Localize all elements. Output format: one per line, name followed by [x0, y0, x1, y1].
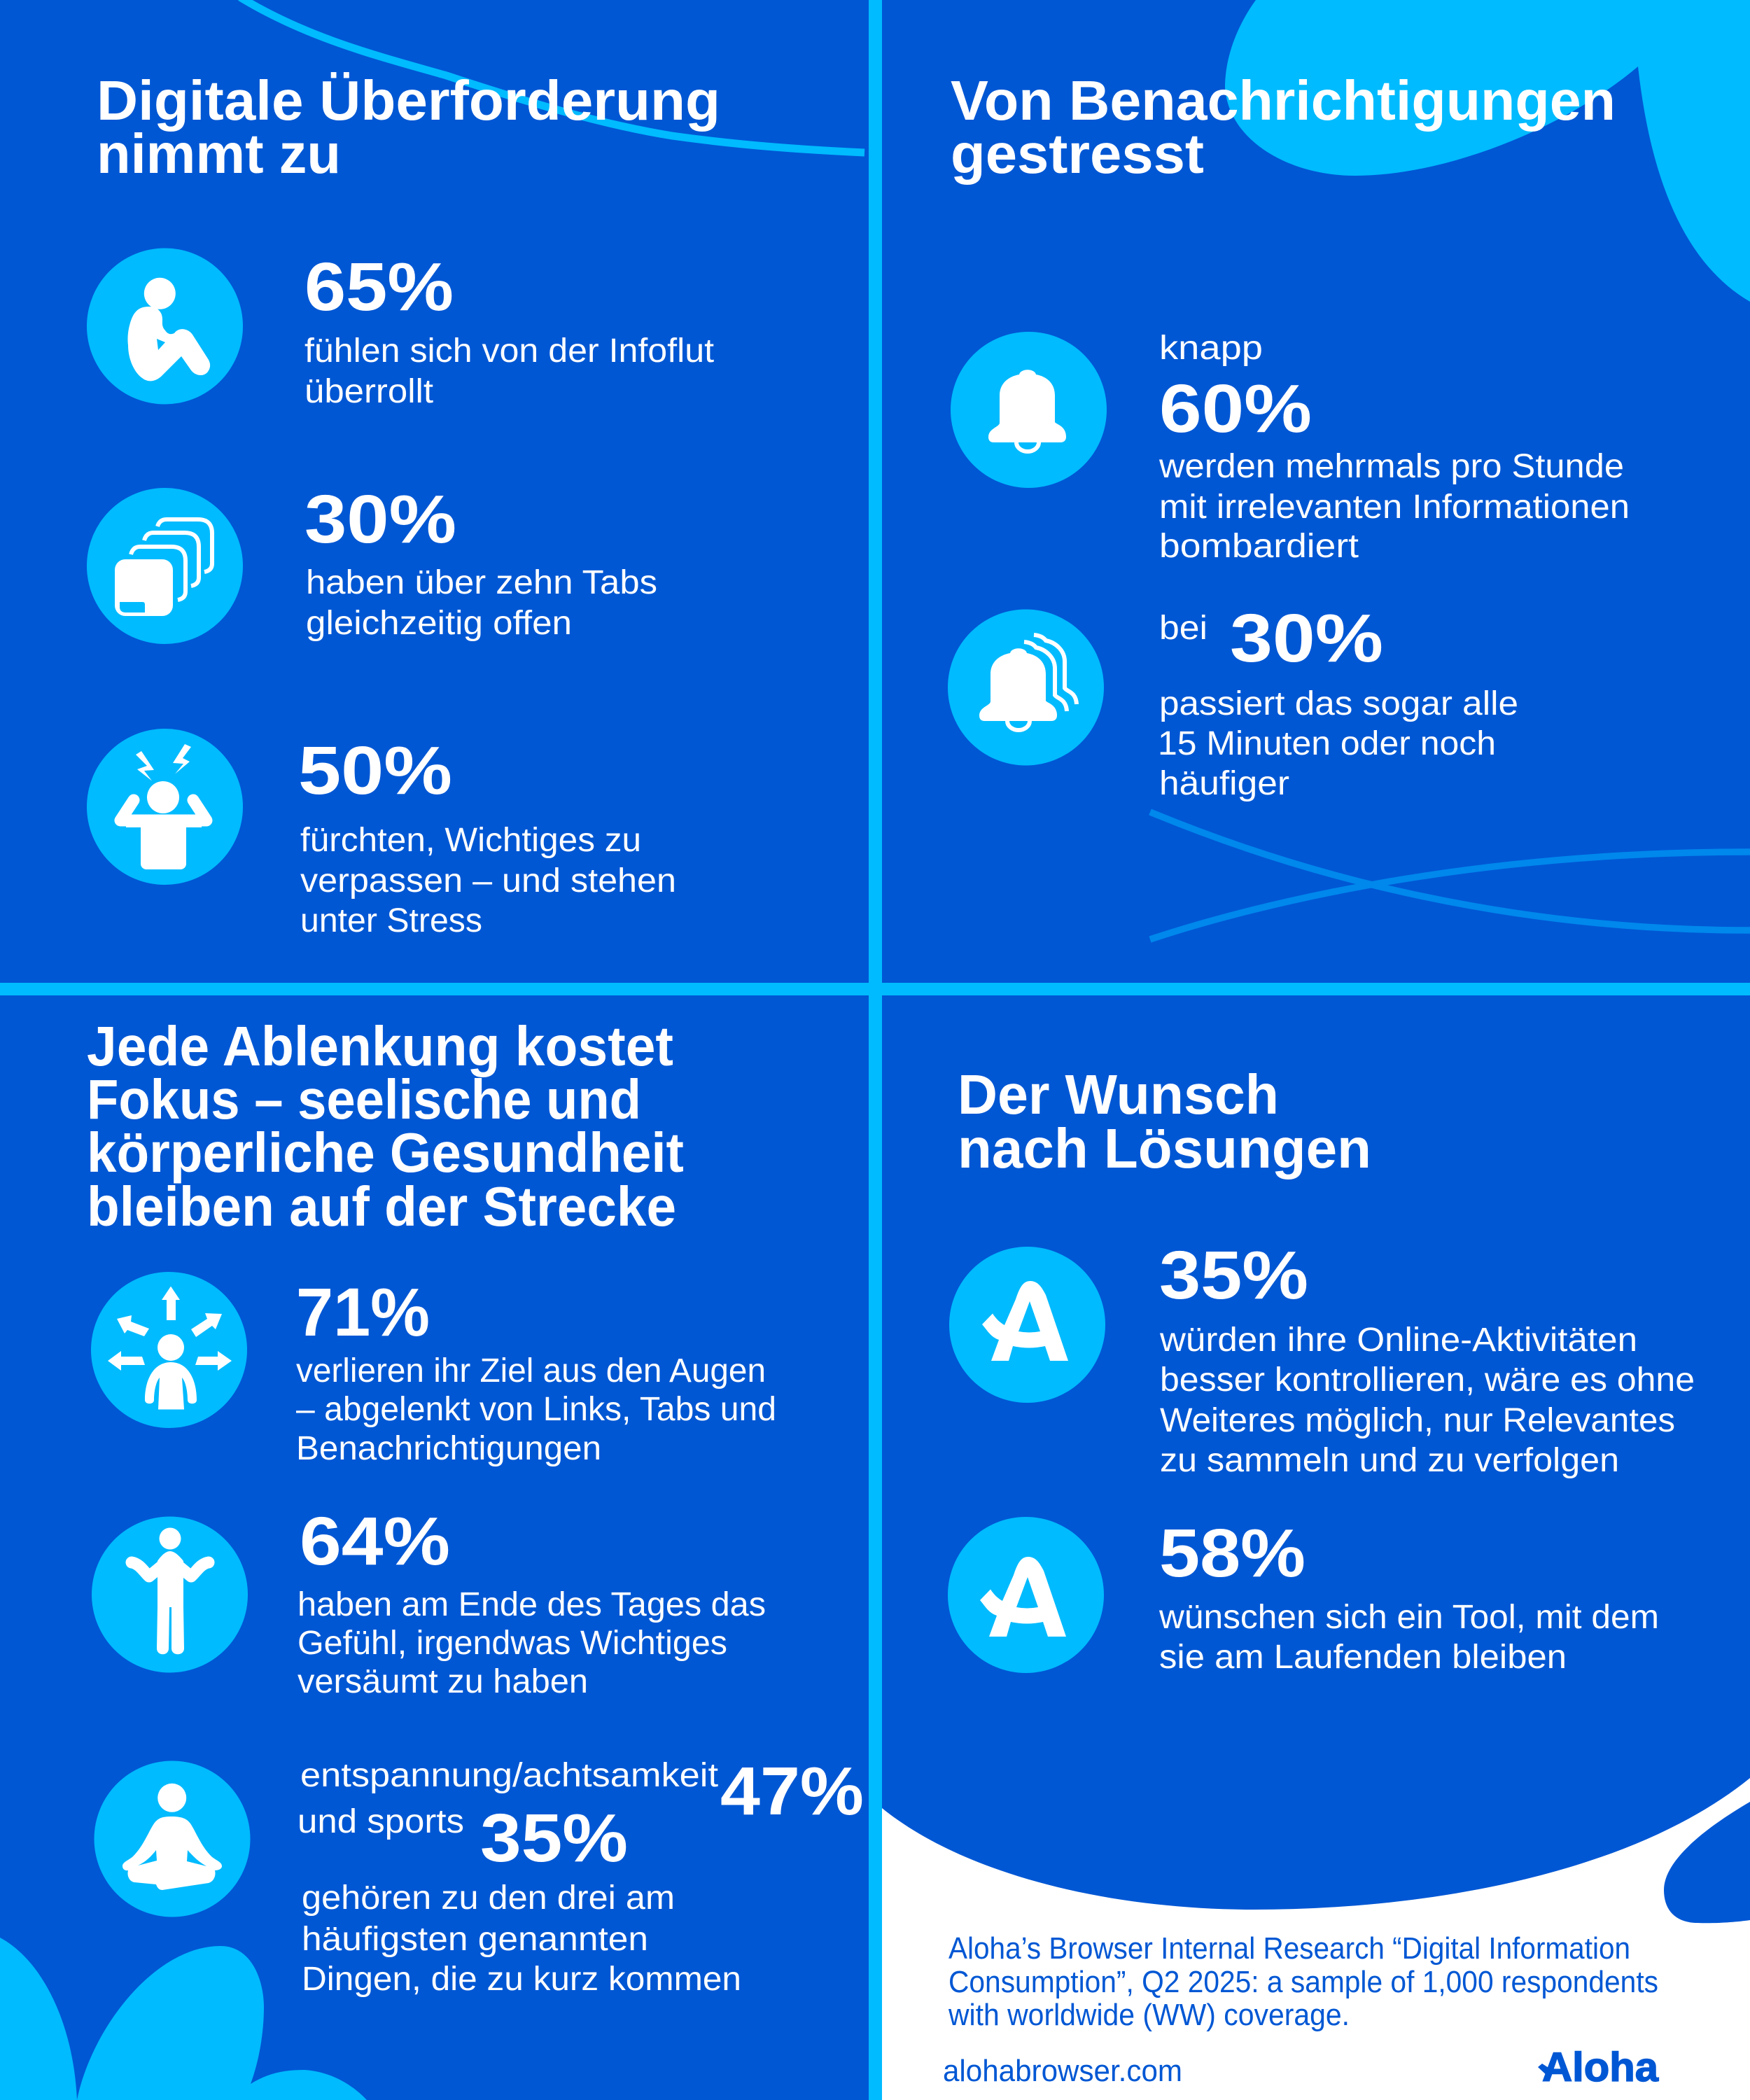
stat: 47% and 35%: häufigsten genannten	[302, 1921, 648, 1958]
stat: 64%: Gefühl, irgendwas Wichtiges	[298, 1625, 727, 1662]
stat: 50%: fürchten, Wichtiges zu	[300, 822, 641, 859]
stat: 65%	[304, 248, 714, 410]
decorative blob top right	[1225, 0, 1750, 302]
panel: Von Benachrichtigungen gestresst	[882, 0, 1750, 983]
stat: knapp 60%: mit irrelevanten Informationen	[1159, 489, 1630, 526]
source note: Consumption”, Q2 2025: a sample of 1,000 respondents	[948, 1965, 1658, 1999]
stat: 47% and 35%: gehören zu den drei am	[302, 1879, 675, 1917]
stat: knapp 60%: werden mehrmals pro Stunde	[1158, 448, 1624, 485]
decorative blue blob	[1664, 1802, 1750, 1923]
stat: 71%: verlieren ihr Ziel aus den Augen	[296, 1352, 766, 1390]
stat: 35%	[1159, 1237, 1695, 1479]
heading: Digitale Überforderung	[97, 69, 720, 132]
panel: Jede Ablenkung kostet Fokus	[0, 995, 869, 2100]
stat: 30%: haben über zehn Tabs	[306, 564, 657, 601]
decorative crossing lines	[1150, 812, 1750, 939]
stat: 50%	[298, 732, 676, 939]
stat: 71%: Benachrichtigungen	[296, 1430, 601, 1467]
stat: 35%: besser kontrollieren, wäre es ohne	[1160, 1362, 1695, 1399]
stat: 50%: verpassen – und stehen	[300, 862, 676, 899]
icon: ringing bell	[948, 609, 1104, 766]
decorative curve line	[240, 0, 864, 153]
stat: 30%	[304, 481, 657, 642]
heading: nach Lösungen	[958, 1117, 1371, 1180]
heading: nimmt zu	[97, 122, 341, 185]
stat: bei 30%: häufiger	[1159, 765, 1289, 802]
icon: shrugging person	[92, 1516, 248, 1673]
stat: bei 30%	[1158, 600, 1518, 802]
icon: Aloha A	[949, 1247, 1105, 1403]
stat: 65%: überrollt	[304, 373, 433, 410]
icon: sitting person	[87, 248, 243, 405]
heading: Jede Ablenkung kostet	[87, 1015, 673, 1077]
stat: 47% and 35%: entspannung/achtsamkeit	[300, 1757, 718, 1794]
stat: 47% and 35%: und sports	[298, 1803, 464, 1840]
stat: 58%	[1158, 1515, 1659, 1676]
stat: 47% and 35%: Dingen, die zu kurz kommen	[302, 1961, 741, 1998]
stat: 71%	[296, 1274, 776, 1467]
website url: alohabrowser.com	[943, 2054, 1182, 2088]
heading: gestresst	[951, 122, 1204, 185]
decorative blob bottom left	[0, 1938, 367, 2100]
icon: stressed person	[87, 729, 243, 885]
stat: 50%: 50%	[298, 732, 452, 808]
stat: 64%: 64%	[300, 1503, 450, 1579]
icon: stacked tabs	[87, 488, 243, 644]
icon: meditating person	[94, 1761, 251, 1917]
stat: 65%: 65%	[304, 248, 454, 325]
stat: bei 30%: 30%	[1230, 600, 1383, 676]
heading: bleiben auf der Strecke	[87, 1175, 676, 1238]
heading: körperliche Gesundheit	[87, 1121, 684, 1184]
heading: Von Benachrichtigungen	[951, 69, 1616, 132]
stat: 35%: 35%	[1159, 1237, 1308, 1313]
stat: 47% and 35%: 35%	[480, 1800, 628, 1876]
stat: 30%: gleichzeitig offen	[306, 605, 572, 642]
logo: Aloha: Aloha	[1542, 2045, 1659, 2090]
stat: 71%: 71%	[296, 1274, 430, 1350]
stat: knapp 60%	[1158, 330, 1630, 565]
stat: 35%: zu sammeln und zu verfolgen	[1160, 1442, 1619, 1479]
stat: bei 30%: bei	[1159, 610, 1208, 647]
stat: 47% and 35%: 47%	[720, 1753, 864, 1829]
panel: Der Wunsch nach Lösungen	[882, 995, 1750, 2100]
stat: 58%: 58%	[1159, 1515, 1306, 1591]
icon: person with arrows	[91, 1272, 247, 1428]
source note: with worldwide (WW) coverage.	[948, 1998, 1350, 2032]
stat: knapp 60%: bombardiert	[1159, 528, 1359, 565]
stat: bei 30%: 15 Minuten oder noch	[1158, 725, 1496, 762]
stat: 35%: Weiteres möglich, nur Relevantes	[1160, 1402, 1675, 1439]
stat: 64%: versäumt zu haben	[298, 1663, 588, 1700]
stat: 35%: würden ihre Online-Aktivitäten	[1159, 1322, 1637, 1359]
stat: 64%	[298, 1503, 766, 1700]
source note: Aloha’s Browser Internal Research “Digital Information	[948, 1931, 1630, 1966]
stat: 64%: haben am Ende des Tages das	[298, 1586, 766, 1623]
stat: bei 30%: passiert das sogar alle	[1159, 685, 1518, 722]
stat: 47% and 35%	[298, 1753, 864, 1998]
stat: 71%: – abgelenkt von Links, Tabs und	[296, 1391, 776, 1428]
stat: 58%: wünschen sich ein Tool, mit dem	[1158, 1599, 1659, 1636]
heading: Der Wunsch	[958, 1063, 1279, 1126]
panel: Digitale Überforderung	[0, 0, 869, 983]
stat: 65%: fühlen sich von der Infoflut	[304, 332, 714, 370]
stat: knapp 60%: 60%	[1159, 370, 1312, 447]
heading: Fokus – seelische und	[87, 1068, 641, 1130]
stat: 50%: unter Stress	[300, 902, 482, 939]
icon: Aloha A second	[948, 1517, 1104, 1673]
stat: knapp 60%: knapp	[1159, 330, 1263, 367]
icon: bell	[951, 332, 1107, 488]
blue area with curved bottom edge	[882, 995, 1750, 1910]
stat: 30%: 30%	[304, 481, 456, 557]
stat: 58%: sie am Laufenden bleiben	[1159, 1639, 1567, 1676]
